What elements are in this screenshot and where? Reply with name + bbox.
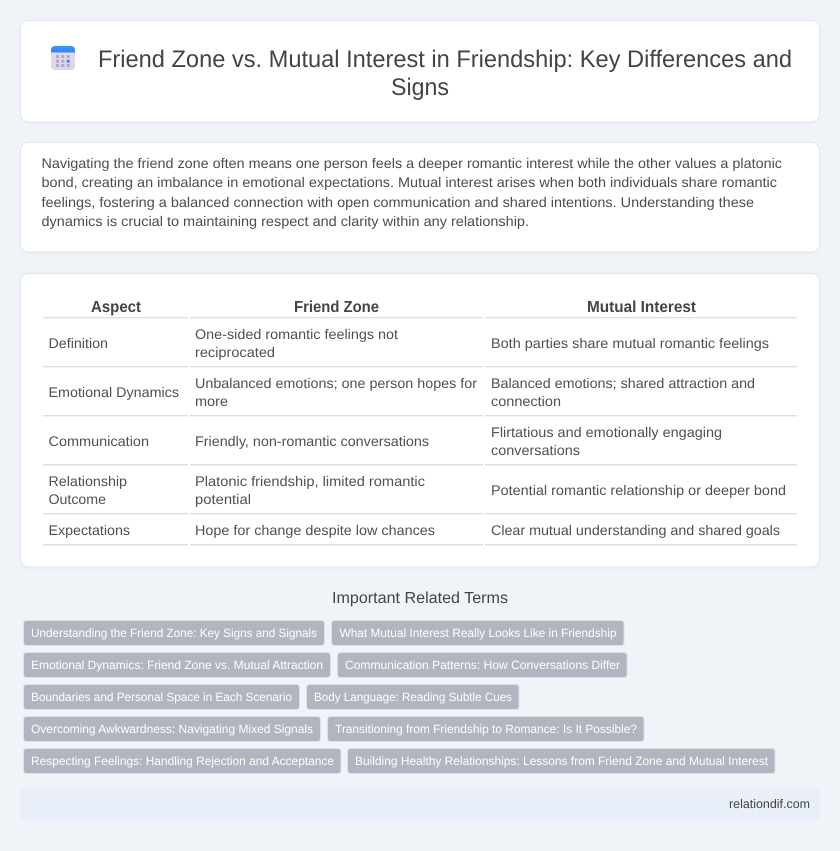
table row: emotional dynamics: Balanced emotions; shared attraction and — [491, 375, 755, 391]
text block: introduction paragraph: feelings, fostering a balanced connection with open communication and shared intentions. Understanding these — [42, 194, 754, 210]
tag — [328, 716, 644, 742]
table row: communication: Communication — [48, 433, 149, 449]
panel: introduction — [20, 142, 820, 252]
title — [98, 46, 792, 101]
table row: emotional dynamics — [43, 375, 797, 416]
table header row: Aspect — [91, 299, 142, 316]
table row: communication — [43, 424, 797, 465]
tag — [24, 652, 330, 678]
table row: expectations: Expectations — [48, 522, 130, 538]
table row: relationship outcome: potential — [195, 491, 251, 507]
tag — [348, 748, 775, 774]
table row: definition: reciprocated — [195, 344, 275, 360]
tag — [24, 748, 341, 774]
footer — [20, 787, 820, 821]
table row: relationship outcome — [43, 473, 797, 514]
table row: relationship outcome: Platonic friendship, limited romantic — [195, 473, 425, 489]
table header row: Mutual Interest — [587, 299, 697, 316]
title: Signs — [391, 74, 449, 101]
tag: Boundaries and Personal Space in Each Scenario — [31, 690, 292, 704]
text block: introduction paragraph: dynamics is crucial to maintaining respect and clarity within any relationship. — [42, 213, 529, 229]
icon: calendar — [51, 46, 75, 70]
heading: important related terms: Important Related Terms — [332, 590, 508, 607]
table row: communication: conversations — [491, 442, 580, 458]
table header row — [43, 299, 797, 318]
table row: definition: Definition — [48, 335, 108, 351]
tag: What Mutual Interest Really Looks Like in Friendship — [340, 626, 617, 640]
tag: Body Language: Reading Subtle Cues — [314, 690, 512, 704]
text block: introduction paragraph: bond, creating an imbalance in emotional expectations. Mutual interest arises when both individuals share romantic — [42, 174, 777, 190]
tag: Respecting Feelings: Handling Rejection and Acceptance — [31, 754, 334, 768]
panel: header — [20, 20, 820, 122]
table row: relationship outcome: Potential romantic relationship or deeper bond — [491, 482, 786, 498]
table row: expectations: Clear mutual understanding and shared goals — [491, 522, 780, 538]
panel: related term tags — [24, 620, 775, 774]
table row: expectations — [43, 522, 797, 545]
panel: comparison table — [20, 274, 820, 567]
table row: definition: One-sided romantic feelings not — [195, 326, 398, 342]
text block: introduction paragraph — [42, 155, 782, 229]
tag — [24, 716, 320, 742]
tag: Building Healthy Relationships: Lessons from Friend Zone and Mutual Interest — [355, 754, 769, 768]
tag: Understanding the Friend Zone: Key Signs and Signals — [31, 626, 317, 640]
tag — [24, 620, 324, 646]
table row: emotional dynamics: Emotional Dynamics — [48, 384, 179, 400]
title: Friend Zone vs. Mutual Interest in Friendship: Key Differences and — [98, 46, 792, 73]
table row: emotional dynamics: connection — [491, 393, 561, 409]
table row: relationship outcome: Outcome — [48, 491, 106, 507]
table row: communication: Friendly, non-romantic conversations — [195, 433, 429, 449]
footer: relationdif.com — [729, 797, 810, 811]
table row: emotional dynamics: more — [195, 393, 228, 409]
table row: communication: Flirtatious and emotionally engaging — [491, 424, 722, 440]
tag — [332, 620, 624, 646]
table row: definition: Both parties share mutual romantic feelings — [491, 335, 769, 351]
tag: Transitioning from Friendship to Romance: Is It Possible? — [335, 722, 637, 736]
table row: emotional dynamics: Unbalanced emotions; one person hopes for — [195, 375, 477, 391]
table row: definition — [43, 326, 797, 367]
tag: Overcoming Awkwardness: Navigating Mixed Signals — [31, 722, 313, 736]
table header row: Friend Zone — [294, 299, 379, 316]
table row: expectations: Hope for change despite low chances — [195, 522, 435, 538]
tag — [338, 652, 627, 678]
tag: Communication Patterns: How Conversations Differ — [345, 658, 620, 672]
tag: Emotional Dynamics: Friend Zone vs. Mutual Attraction — [31, 658, 323, 672]
table row: relationship outcome: Relationship — [48, 473, 127, 489]
tag — [306, 684, 519, 710]
text block: introduction paragraph: Navigating the friend zone often means one person feels a deeper romantic interest while the other values a platonic — [42, 155, 782, 171]
tag — [24, 684, 300, 710]
